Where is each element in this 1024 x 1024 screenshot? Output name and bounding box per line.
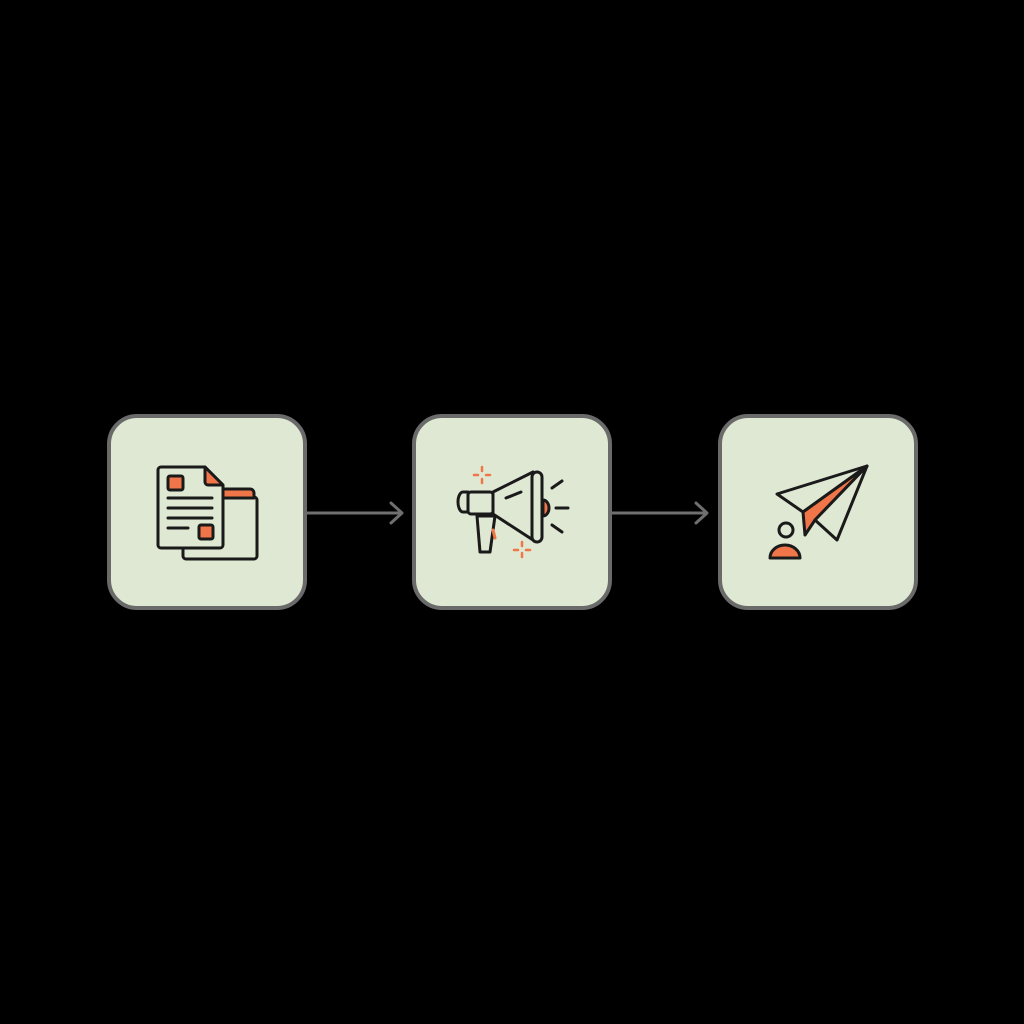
panel: paper plane (720, 416, 916, 608)
icon: megaphone (458, 472, 568, 552)
panel: documents (109, 416, 305, 608)
icon: documents and folder (158, 467, 257, 559)
icon: paper plane with person (770, 466, 867, 558)
panel: megaphone (414, 416, 610, 608)
arrow: step 1 to step 2 (307, 503, 402, 523)
arrow: step 2 to step 3 (612, 503, 707, 523)
